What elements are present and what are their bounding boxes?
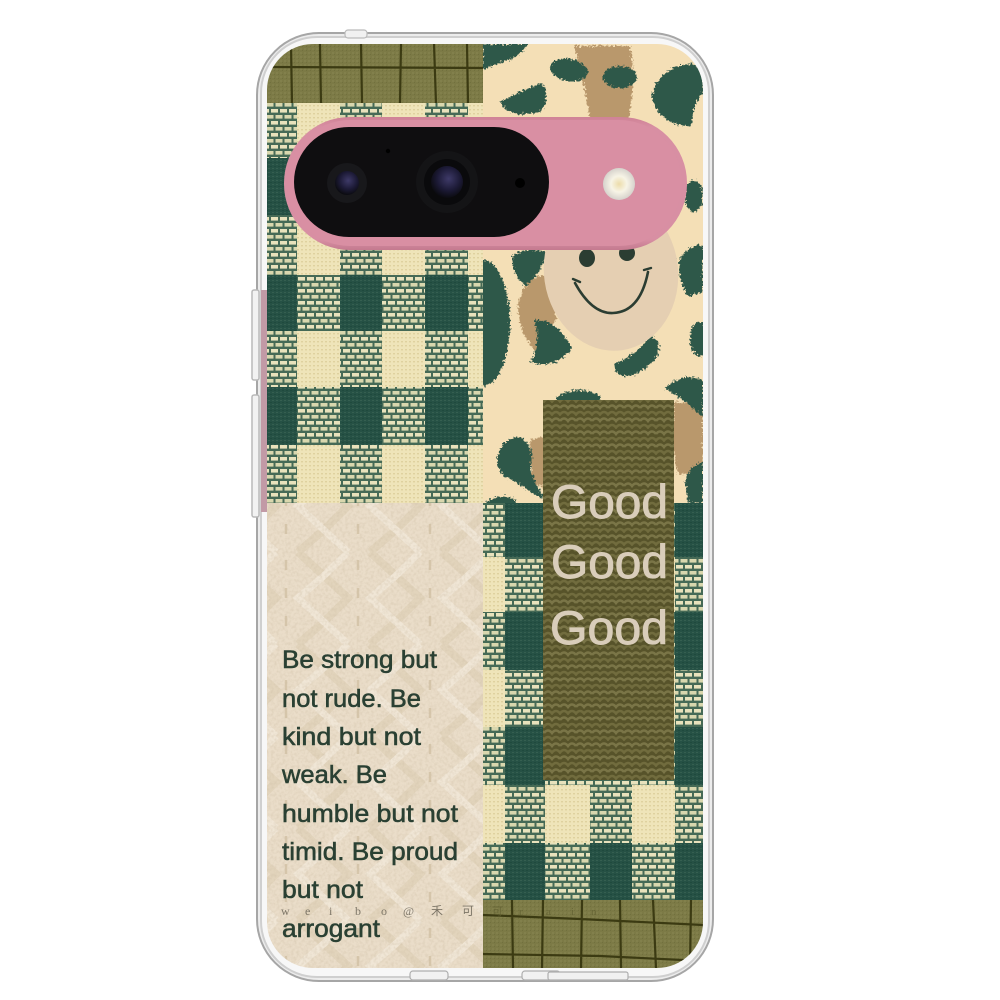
heading: Good Good Good: Good [550,601,668,654]
lens: left [327,163,367,203]
heading: Good Good Good: Good [551,475,668,528]
transparent case shell [257,33,713,981]
text block: motto: arrogant [282,915,380,943]
text block: motto [281,646,458,943]
camera bar [284,117,687,250]
green leopard spots [483,44,703,503]
heading: Good Good Good: Good [551,535,668,588]
patch: upper left gingham [267,103,483,503]
patch: cable knit [267,503,483,968]
patch: leopard fur [483,44,703,503]
case bottom ports [410,971,628,980]
patch: lower right gingham [483,503,703,900]
watermark: weibo@禾可 [281,904,474,918]
printed back panel [267,44,710,968]
patch: top olive grid [267,44,483,103]
microphone dot [386,149,390,153]
pink phone frame edge [261,290,268,512]
lens: main [416,151,478,213]
heading: Good Good Good [550,475,668,654]
phone case infographic [251,29,714,982]
text block: motto: weak. Be [281,761,387,789]
flash [603,168,635,200]
brown leopard patches [518,46,703,490]
text block: motto: kind but not [282,723,421,751]
case top port [345,30,367,38]
patch: olive canvas label [543,400,674,780]
text block: motto: but not [282,876,363,904]
text block: motto: Be strong but [282,646,437,674]
text block: motto: timid. Be proud [282,838,458,866]
camera window [294,127,549,237]
case side buttons [252,290,259,517]
text block: motto: humble but not [282,800,458,828]
text block: motto: not rude. Be [282,685,421,713]
patch: bottom olive grid [483,900,703,968]
patch: smiley face [544,232,678,350]
sensor dot [515,178,525,188]
faint watermark on olive: 可rain [492,906,597,918]
